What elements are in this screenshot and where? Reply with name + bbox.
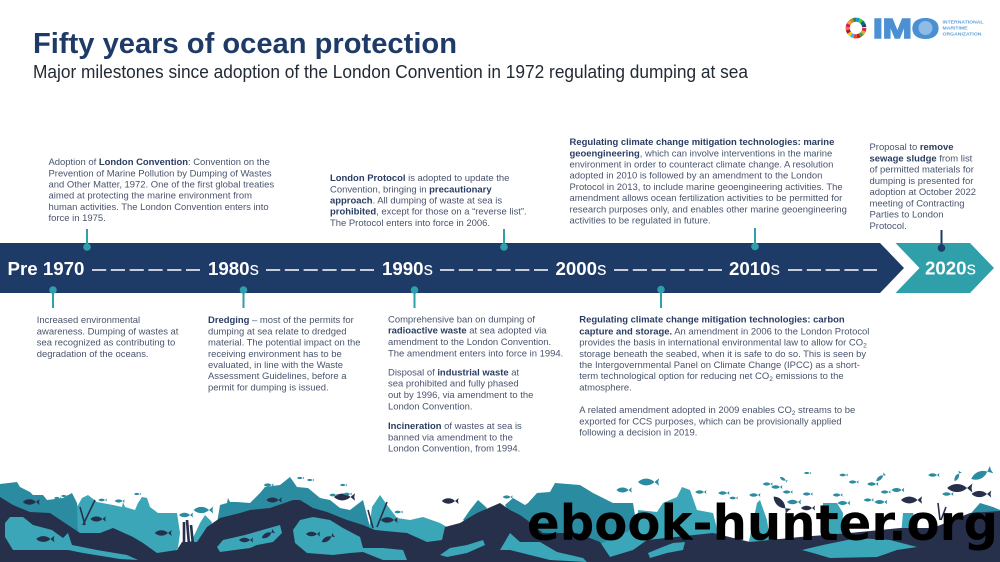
navy seabed: [0, 497, 1000, 562]
marker: London Protocol: [501, 229, 507, 250]
text: carbon capture and storage: emissions to the: [773, 371, 844, 382]
subtitle: Major milestones since adoption of the London Convention in 1972 regulating dumping at sea: [33, 61, 749, 82]
text: 1990s bans: out by 1996, via amendment to the: [388, 390, 533, 401]
text: London Convention: human activities. The London Convention enters into: [48, 202, 269, 213]
text: environmental awareness: degradation of the oceans.: [37, 349, 149, 360]
text: carbon capture and storage: An amendment in 2006 to the London Protocol: [672, 326, 869, 337]
text: London Protocol: approach: [330, 196, 373, 206]
text: 1990s bans: sea prohibited and fully phased: [388, 379, 519, 390]
label: 2010s: 2010s: [729, 258, 780, 279]
text: 1990s bans: of wastes at sea is: [442, 421, 522, 432]
text: London Protocol: . All dumping of waste at sea is: [372, 196, 502, 206]
seaweed: [80, 500, 946, 545]
text: sewage sludge proposal: meeting of Contracting: [870, 198, 964, 209]
text: 1990s bans: Comprehensive ban on dumping of: [388, 314, 535, 326]
text: marine geoengineering: Protocol in 2013, to include marine geoengineering activities. The: [570, 182, 843, 193]
text: marine geoengineering: amendment allows ocean fertilization activities to be permitted for: [570, 193, 842, 204]
text: carbon capture and storage: streams to be: [795, 405, 855, 416]
text: dredging: permit for dumping is issued.: [208, 383, 329, 394]
text: marine geoengineering: , which can involve interventions in the marine: [640, 148, 832, 159]
text: sewage sludge proposal: Protocol.: [870, 221, 907, 232]
text: marine geoengineering: adopted in 2010 is followed by an amendment to the London: [570, 171, 822, 182]
markers: [50, 228, 944, 308]
text: London Protocol: prohibited: [330, 207, 376, 218]
text: dredging: material. The potential impact on the: [208, 338, 360, 348]
text: carbon capture and storage: provides the basis in international environmental law to allow for CO: [579, 338, 863, 349]
back reef dark teal: [0, 477, 1000, 552]
text: carbon capture and storage: 2: [863, 343, 867, 350]
text: London Convention: and Other Matter, 1972. One of the first global treaties: [48, 180, 274, 190]
text: London Convention: Prevention of Marine Pollution by Dumping of Wastes: [48, 168, 272, 179]
text: carbon capture and storage: 2: [792, 410, 796, 417]
text: 1990s bans: banned via amendment to the: [388, 432, 513, 443]
marker: London Convention: [84, 229, 90, 250]
text: marine geoengineering: activities to be regulated in future.: [570, 216, 711, 227]
text: marine geoengineering: Regulating climate change mitigation technologies: marine: [570, 137, 834, 148]
text: carbon capture and storage: capture and storage.: [579, 326, 672, 337]
text: sewage sludge proposal: from list: [937, 153, 973, 164]
icon: SDG colour wheel: [848, 20, 864, 36]
text: dredging: dumping at sea relate to dredged: [208, 326, 347, 337]
text: London Protocol: precautionary: [429, 184, 492, 195]
marker: 1990s: [412, 287, 417, 308]
text: London Convention: Adoption of London Convention: Convention on the: [48, 157, 270, 168]
text: 1990s bans: The amendment enters into force in 1994.: [388, 348, 563, 359]
marker: pre 1970: [50, 287, 56, 308]
text: carbon capture and storage: term technological option for reducing net CO: [579, 371, 769, 382]
cave patches: [5, 517, 917, 562]
text: sewage sludge proposal: adoption at October 2022: [870, 187, 976, 198]
text: marine geoengineering: research purposes only, and enables other marine geoengineering: [570, 204, 847, 215]
text: carbon capture and storage: A related amendment adopted in 2009 enables CO: [579, 405, 792, 416]
text: London Protocol: The Protocol enters into force in 2006.: [330, 218, 490, 229]
text: environmental awareness: Increased environmental: [37, 315, 140, 326]
text: sewage sludge proposal: sewage sludge: [870, 153, 937, 164]
text: carbon capture and storage: Regulating climate change mitigation technologies: carbon: [579, 315, 845, 326]
text: dredging: Assessment Guidelines, before a: [208, 371, 347, 382]
timeline bar: [0, 243, 904, 293]
ocean reef illustration: [0, 466, 1000, 562]
icon: emblem: [918, 21, 932, 35]
text: carbon capture and storage: storage beneath the seabed, when it is safe to do so. This is seen by: [579, 349, 866, 360]
label: Pre 1970: Pre 1970: [8, 258, 84, 279]
text: London Convention: aimed at protecting the marine environment from: [48, 191, 252, 202]
marker: sewage sludge: [939, 230, 944, 251]
label: 2000s: 2000s: [556, 258, 606, 279]
text: environmental awareness: sea recognized as contributing to: [37, 338, 175, 348]
timeline chevron 2020s: [896, 243, 994, 293]
marker: 2000s: [658, 287, 664, 308]
logo caption: ORGANIZATION: [942, 32, 982, 37]
label: 1990s: 1990s: [382, 258, 433, 279]
logo wordmark: IMO: [873, 13, 939, 44]
text: sewage sludge proposal: dumping is presented for: [870, 176, 973, 187]
text: marine geoengineering: environment in order to counteract climate change. A resolution: [570, 160, 833, 170]
logo caption: INTERNATIONAL: [942, 20, 984, 24]
text: dredging: receiving environment has to be: [208, 349, 342, 360]
mid reef light teal: [77, 487, 963, 560]
text: sewage sludge proposal: Parties to London: [870, 210, 943, 221]
text: London Protocol: Convention, bringing in: [330, 184, 429, 195]
text: dredging: evaluated, in line with the Waste: [208, 360, 343, 371]
label: 2020s: 2020s: [925, 258, 976, 278]
text: London Protocol: , except for those on a “reverse list”.: [376, 207, 527, 218]
text: 1990s bans: industrial waste at: [437, 367, 519, 378]
fish teal: [54, 466, 993, 518]
timeline dashes: [92, 269, 877, 271]
text: dredging: Dredging – most of the permits for: [208, 315, 354, 326]
text: carbon capture and storage: atmosphere.: [579, 383, 632, 394]
watermark: ebook-hunter.org: [527, 495, 998, 552]
text: 1990s bans: London Convention, from 1994.: [388, 444, 520, 455]
fish navy: [23, 484, 991, 544]
text: sewage sludge proposal: Proposal to remove: [870, 142, 953, 153]
text: 1990s bans: at sea adopted via: [467, 326, 547, 337]
text: marine geoengineering: geoengineering: [570, 148, 640, 159]
text: London Protocol: London Protocol is adopted to update the: [330, 173, 509, 184]
text: carbon capture and storage: exported for CCS purposes, which can be provisionally applied: [579, 416, 842, 427]
text: 1990s bans: radioactive waste: [388, 326, 467, 337]
marker: geoengineering: [752, 228, 758, 249]
logo: IMO: [848, 13, 984, 44]
text: 1990s bans: London Convention.: [388, 401, 472, 412]
label: 1980s: 1980s: [208, 258, 259, 279]
title: Fifty years of ocean protection: [33, 28, 457, 60]
logo caption: [942, 20, 984, 37]
text: carbon capture and storage: 2: [769, 376, 773, 383]
text: London Convention: force in 1975.: [48, 213, 106, 224]
text: environmental awareness: awareness. Dumping of wastes at: [37, 326, 179, 337]
text: 1990s bans: amendment to the London Convention.: [388, 337, 551, 348]
text: sewage sludge proposal: of permitted materials for: [870, 164, 974, 176]
logo caption: MARITIME: [942, 26, 968, 30]
text: carbon capture and storage: the Intergovernmental Panel on Climate Change (IPCC) as a short-: [579, 360, 860, 371]
text: carbon capture and storage: following a decision in 2019.: [579, 428, 697, 439]
text: 1990s bans: Disposal of: [388, 367, 437, 378]
marker: 1980s: [241, 287, 246, 308]
text: 1990s bans: Incineration: [388, 421, 442, 432]
